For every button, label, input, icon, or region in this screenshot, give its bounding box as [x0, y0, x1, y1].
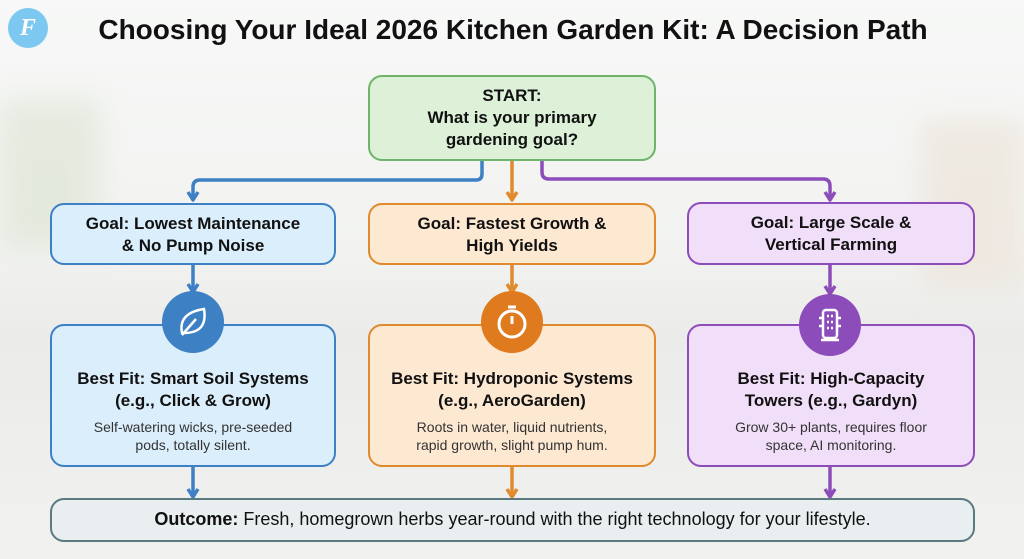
- icon: stopwatch: [481, 291, 543, 353]
- best fit: hydroponic: Best Fit: Hydroponic Systems: [391, 369, 633, 388]
- best fit: smart soil: Best Fit: Smart Soil Systems: [77, 369, 309, 388]
- best fit: towers: [687, 324, 975, 467]
- icon: tower: [799, 294, 861, 356]
- goal: fastest growth: High Yields: [466, 236, 558, 255]
- outcome: Outcome: Fresh, homegrown herbs year-round with the right technology for your lifestyle.: [154, 509, 871, 529]
- start box: [368, 75, 656, 161]
- best fit: smart soil: [50, 324, 336, 467]
- best fit: towers: Towers (e.g., Gardyn): [745, 391, 917, 410]
- best fit: hydroponic: Roots in water, liquid nutrients,: [417, 419, 607, 435]
- goal: low maintenance: Goal: Lowest Maintenance: [86, 214, 300, 233]
- goal: large scale: Vertical Farming: [765, 235, 897, 254]
- goal: low maintenance: & No Pump Noise: [122, 236, 264, 255]
- goal: fastest growth: [368, 203, 656, 265]
- best fit: smart soil: pods, totally silent.: [135, 437, 251, 453]
- best fit: smart soil: Self-watering wicks, pre-seeded: [94, 419, 292, 435]
- goal: large scale: Goal: Large Scale &: [751, 213, 911, 232]
- best fit: towers: Grow 30+ plants, requires floor: [735, 419, 927, 435]
- logo: [8, 8, 48, 48]
- decorative background blobs: [0, 100, 100, 250]
- start box: gardening goal?: [446, 130, 578, 149]
- title: Choosing Your Ideal 2026 Kitchen Garden Kit: A Decision Path: [98, 14, 928, 45]
- logo: F: [20, 15, 36, 41]
- best fit: smart soil: (e.g., Click & Grow): [115, 391, 271, 410]
- goal: large scale: [687, 202, 975, 265]
- best fit: towers: space, AI monitoring.: [766, 437, 896, 453]
- start box: What is your primary: [427, 108, 597, 127]
- best fit: towers: Best Fit: High-Capacity: [737, 369, 925, 388]
- best fit: hydroponic: (e.g., AeroGarden): [438, 391, 586, 410]
- start box: START:: [482, 86, 542, 105]
- best fit: hydroponic: rapid growth, slight pump hum.: [416, 437, 608, 453]
- goal: fastest growth: Goal: Fastest Growth &: [418, 214, 606, 233]
- best fit: hydroponic: [368, 324, 656, 467]
- outcome: [50, 498, 975, 542]
- icon: leaf: [162, 291, 224, 353]
- goal: low maintenance: [50, 203, 336, 265]
